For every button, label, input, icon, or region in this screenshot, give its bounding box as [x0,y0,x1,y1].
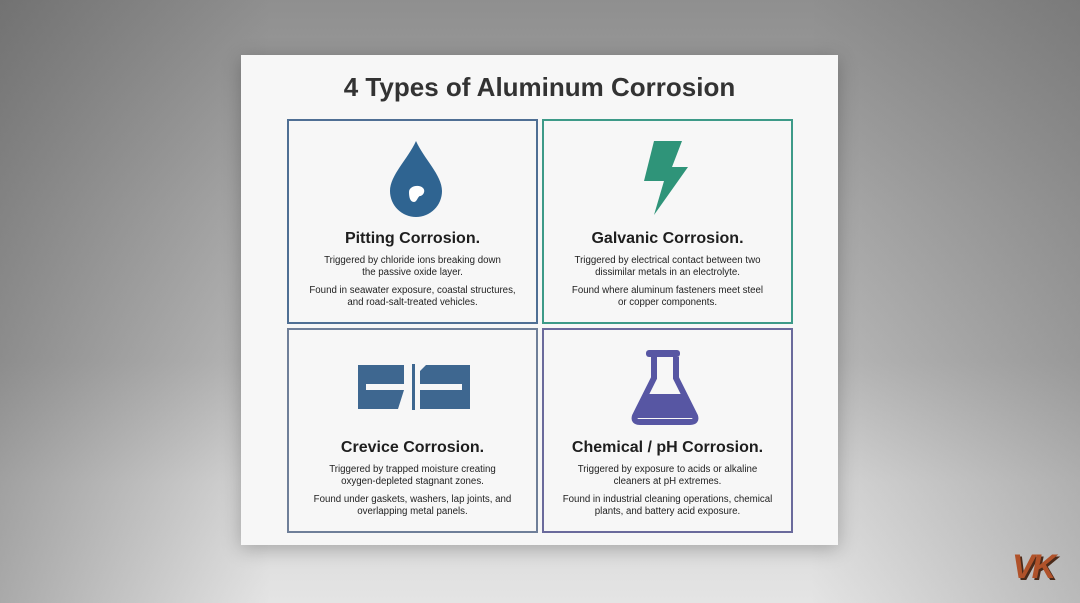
text: or copper components. [618,297,717,308]
text: Found in seawater exposure, coastal structures, [309,285,516,296]
text: Triggered by trapped moisture creating [329,464,496,475]
text [574,255,760,278]
heading: Crevice Corrosion. [341,439,484,456]
text: Triggered by electrical contact between two [575,255,760,266]
text: oxygen-depleted stagnant zones. [341,476,484,487]
panel: crevice [287,328,538,533]
icon: crevice [358,364,470,410]
text: plants, and battery acid exposure. [595,506,740,517]
panel: pitting [287,119,538,324]
heading: Galvanic Corrosion. [591,230,744,247]
text [563,494,772,517]
text: Found in industrial cleaning operations, chemical [563,494,772,505]
text: dissimilar metals in an electrolyte. [595,267,740,278]
icon: lightning [644,141,688,215]
text [329,464,496,487]
heading: Pitting Corrosion. [345,230,480,247]
text: Triggered by exposure to acids or alkaline [578,464,757,475]
text: and road-salt-treated vehicles. [347,297,478,308]
logo: VK [1012,548,1053,586]
text: Triggered by chloride ions breaking down [324,255,501,266]
text [572,285,763,308]
panel: galvanic [542,119,793,324]
text [309,285,516,308]
title: 4 Types of Aluminum Corrosion [344,72,735,102]
text: Found where aluminum fasteners meet steel [572,285,763,296]
icon: flask [632,350,698,425]
panel: chemical [542,328,793,533]
text [314,494,511,517]
board [241,55,838,545]
heading: Chemical / pH Corrosion. [572,439,763,456]
text [324,255,501,278]
text: Found under gaskets, washers, lap joints, and [314,494,511,505]
text: cleaners at pH extremes. [614,476,721,487]
text [578,464,757,487]
text: the passive oxide layer. [362,267,463,278]
icon: water drop [390,141,442,217]
text: overlapping metal panels. [357,506,468,517]
